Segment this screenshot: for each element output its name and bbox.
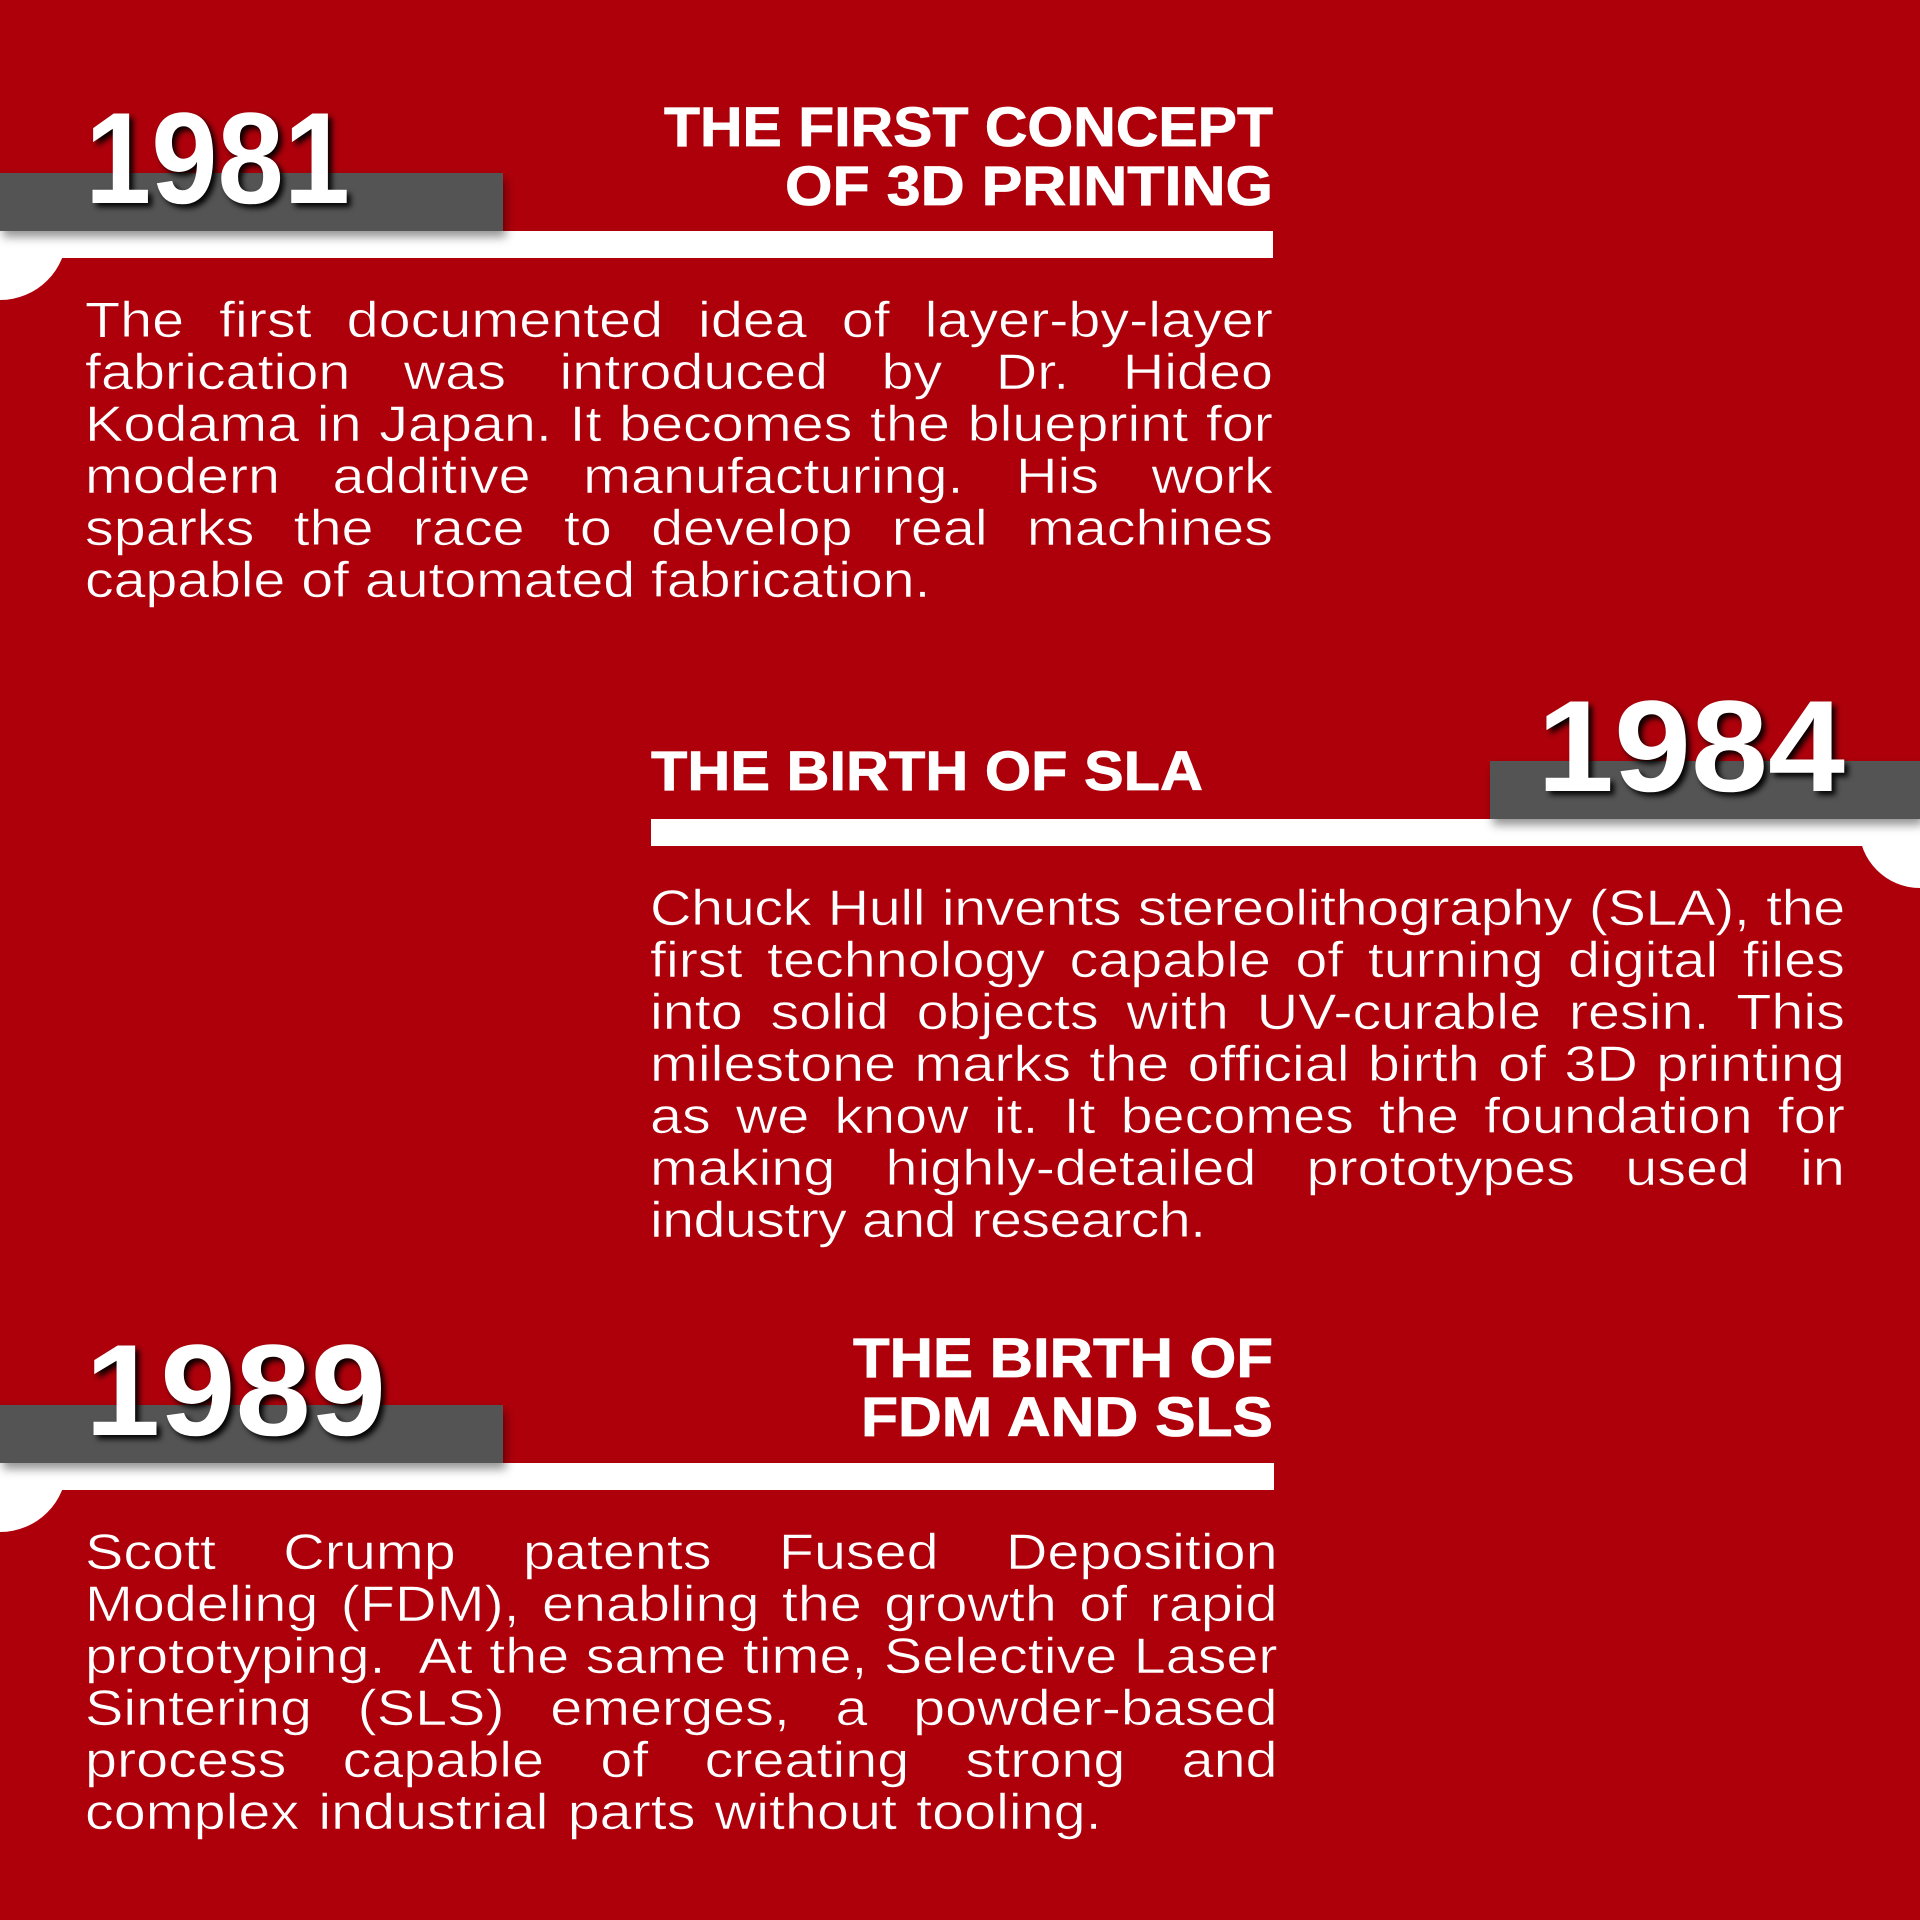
heading: birth of FDM and SLS [853,1326,1273,1448]
text block 1981: The first documented idea of layer-by-layer [85,292,1273,348]
text block 1984: as we know it. It becomes the foundation for [650,1088,1845,1144]
text block 1981 [85,292,1273,608]
heading: first concept: OF 3D PRINTING [785,154,1273,217]
text block 1984: making highly-detailed prototypes used in [650,1140,1845,1196]
text block 1989: process capable of creating strong and [85,1732,1278,1788]
year 1984: 1984 [1537,673,1845,819]
text block 1981: capable of automated fabrication. [85,552,930,608]
grey band 1981 [0,173,503,231]
heading: birth of FDM and SLS: THE BIRTH OF [853,1326,1273,1389]
white rule 1984 [651,819,1920,846]
text block 1984: industry and research. [650,1192,1205,1248]
grey band 1989 [0,1405,503,1463]
text block 1984: Chuck Hull invents stereolithography (SLA), the [650,880,1845,936]
text block 1989: Scott Crump patents Fused Deposition [85,1524,1278,1580]
heading: birth of SLA: THE BIRTH OF SLA [651,739,1203,802]
grey band 1984 [1490,761,1920,819]
text block 1989: prototyping. At the same time, Selective Laser [85,1628,1278,1684]
text block 1981: Kodama in Japan. It becomes the blueprint for [85,396,1273,452]
text block 1981: fabrication was introduced by Dr. Hideo [85,344,1273,400]
text block 1989: complex industrial parts without tooling. [85,1784,1102,1840]
text block 1989: Sintering (SLS) emerges, a powder-based [85,1680,1278,1736]
decorative circle 1984 [1862,846,1920,888]
heading: first concept [664,95,1273,217]
decorative circle 1989 [0,1490,62,1532]
heading: birth of FDM and SLS: FDM AND SLS [861,1385,1273,1448]
year 1989: 1989 [85,1317,386,1463]
heading: first concept: THE FIRST CONCEPT [664,95,1273,158]
text block 1984: into solid objects with UV-curable resin. This [650,984,1845,1040]
decorative circle 1981 [0,258,62,300]
year 1981: 1981 [85,85,350,231]
text block 1984: milestone marks the official birth of 3D printing [650,1036,1845,1092]
white rule 1989 [0,1463,1274,1490]
text block 1989 [85,1524,1278,1840]
text block 1981: sparks the race to develop real machines [85,500,1273,556]
text block 1989: Modeling (FDM), enabling the growth of rapid [85,1576,1278,1632]
white rule 1981 [0,231,1273,258]
text block 1984 [650,880,1845,1248]
text block 1984: first technology capable of turning digital files [650,932,1845,988]
text block 1981: modern additive manufacturing. His work [85,448,1273,504]
